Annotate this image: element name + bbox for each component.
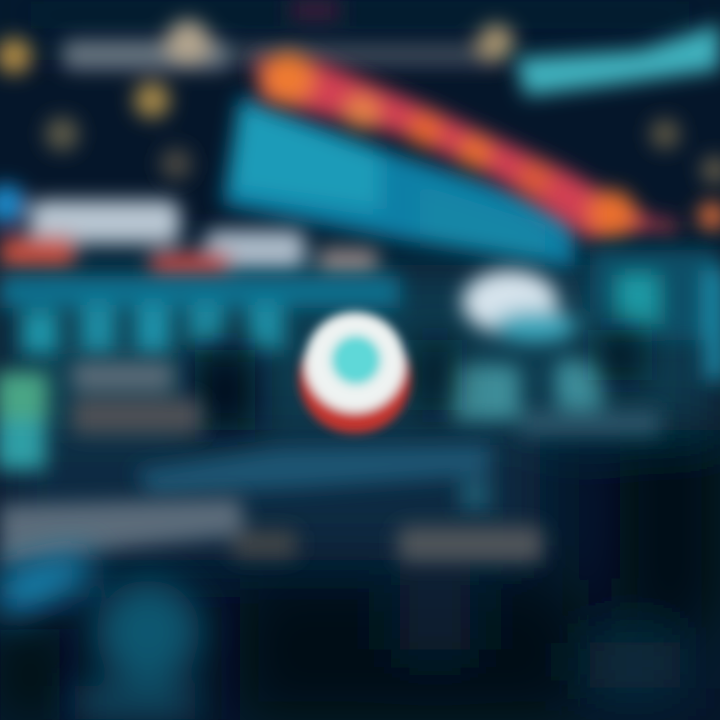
blue streak and circle	[0, 552, 200, 720]
top-left amber dots and header bar	[0, 0, 720, 184]
orange-red diagonal band	[255, 52, 720, 240]
teal row of cards	[0, 276, 400, 354]
middle blue band	[135, 445, 490, 510]
lower-left green card and grey bars	[0, 362, 202, 470]
teal-blue panel	[222, 95, 575, 268]
right side teal cards	[450, 250, 720, 435]
white and red label bars	[0, 184, 378, 282]
top-right teal streak	[515, 24, 720, 96]
dark gaps	[195, 330, 640, 430]
lower grey bands	[0, 498, 543, 565]
circular gauge icon	[299, 312, 411, 434]
